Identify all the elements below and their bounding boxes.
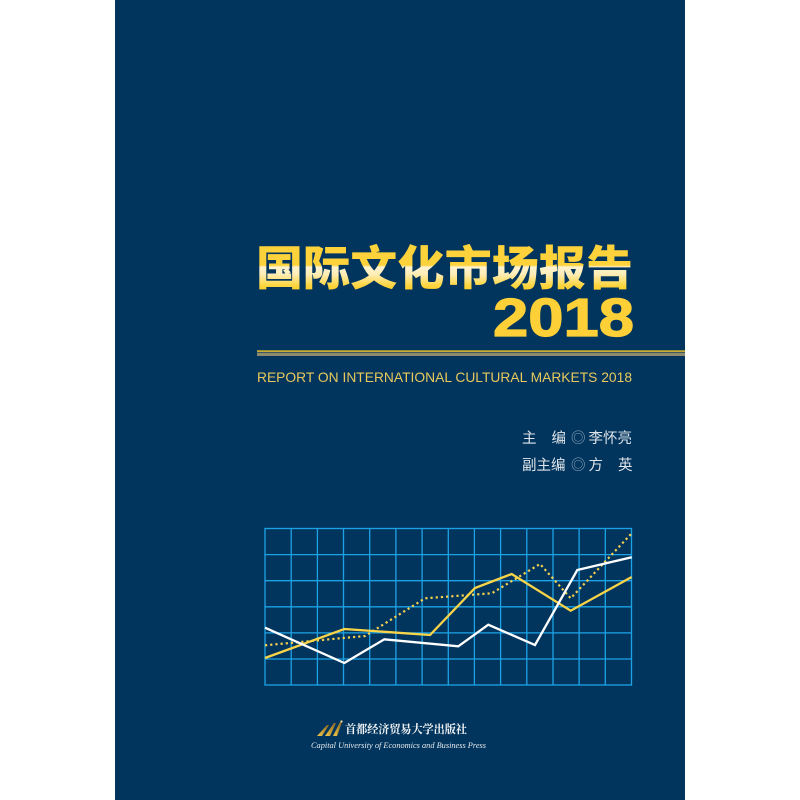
line chart: [265, 528, 632, 685]
title: Chinese report name: 国际文化市场报告: [256, 230, 633, 299]
heading: year 2018: 2018: [493, 288, 634, 348]
deputy editor line: ◎: [571, 454, 586, 475]
text block: editors: [522, 427, 633, 475]
dotted yellow series: [265, 533, 632, 645]
editor line: 李怀亮: [588, 427, 632, 448]
publisher Chinese name: 首都经济贸易大学出版社: [345, 721, 467, 737]
divider: double rule: [257, 350, 685, 356]
deputy editor line: [522, 454, 633, 475]
icon: publisher mark: [317, 720, 343, 736]
panel: navy cover background: [115, 0, 685, 800]
chart grid: [265, 528, 632, 685]
publisher logo and name: [311, 720, 486, 750]
subtitle: English report name: REPORT ON INTERNATIONAL CULTURAL MARKETS 2018: [257, 370, 632, 385]
editor line: ◎: [571, 427, 586, 448]
editor line: [522, 427, 632, 448]
publisher English name: Capital University of Economics and Business Press: [311, 741, 486, 750]
deputy editor line: 副主编: [522, 454, 566, 475]
solid yellow series: [265, 574, 632, 658]
deputy editor line: 方: [588, 454, 603, 475]
editor line: 主: [522, 427, 536, 448]
solid white series: [265, 557, 632, 663]
deputy editor line: 英: [618, 454, 633, 475]
editor line: 编: [552, 427, 566, 448]
